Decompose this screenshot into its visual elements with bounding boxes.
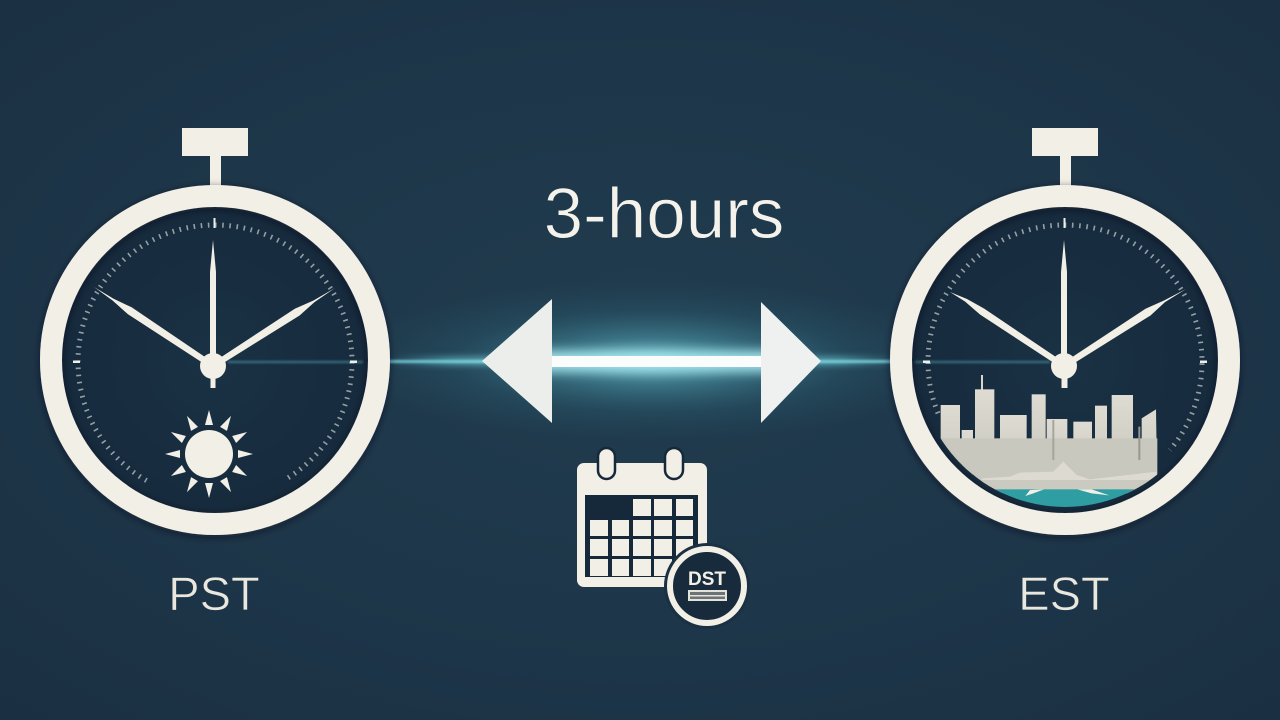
badge strip (688, 590, 727, 601)
calendar grid background (585, 495, 698, 577)
tick marks (928, 225, 1202, 450)
dial (51, 196, 379, 524)
outer ring (901, 196, 1229, 524)
tick marks (78, 225, 352, 481)
crown (1032, 128, 1098, 188)
badge text: DST (688, 569, 726, 590)
icon: city skyline (940, 375, 1158, 507)
clock hands (94, 240, 335, 388)
clock hands (950, 240, 1186, 388)
dial (901, 196, 1229, 524)
icon: sun (165, 410, 253, 498)
double-headed arrow (482, 299, 821, 423)
right stopwatch: EST (901, 128, 1229, 524)
calendar body (577, 463, 707, 587)
calendar date cells (590, 499, 693, 576)
arrow shaft (548, 356, 765, 367)
outer ring (51, 196, 379, 524)
DST badge (664, 543, 750, 629)
glow behind arrow (230, 281, 1060, 441)
heading: 3-hours: 3-hours (544, 175, 784, 254)
label: PST: PST (168, 567, 260, 620)
left arrowhead (482, 299, 552, 423)
calendar binding rings (598, 448, 683, 479)
left stopwatch: PST (51, 128, 379, 524)
beam inside dial (915, 361, 1050, 363)
major tick marks (923, 218, 1207, 363)
beam inside dial (228, 361, 363, 363)
crown (182, 128, 248, 188)
label: EST: EST (1018, 567, 1110, 620)
right arrowhead (761, 302, 821, 423)
icon: calendar with DST badge (577, 448, 750, 629)
major tick marks (73, 218, 357, 363)
